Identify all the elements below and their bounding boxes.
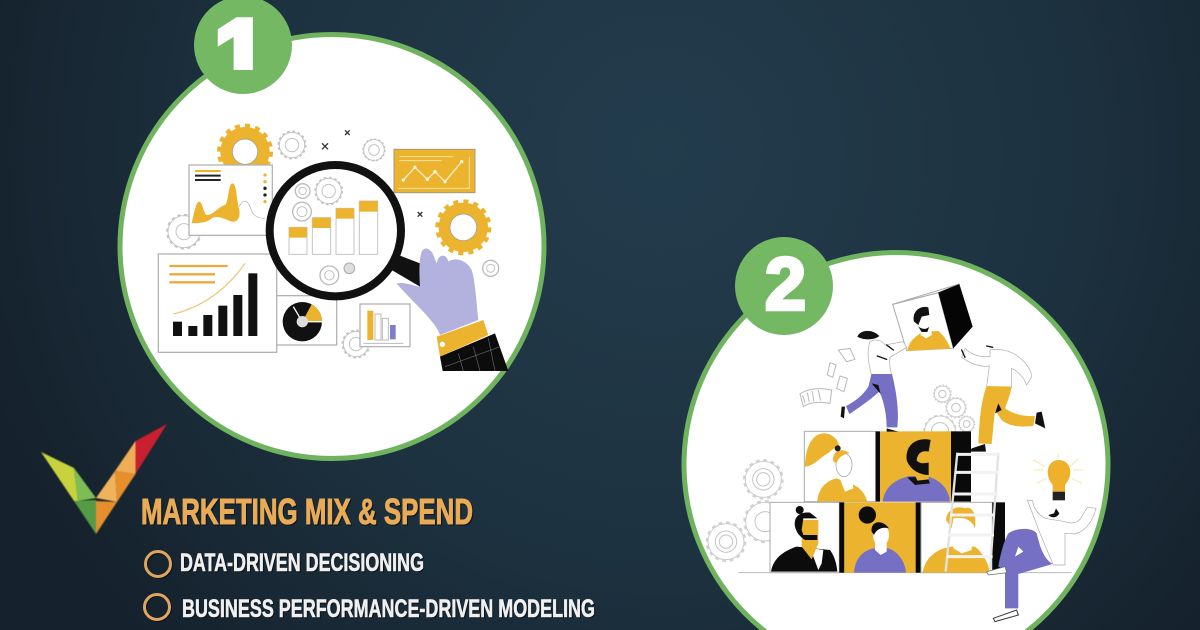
icon: magnifier handle [392, 255, 420, 287]
bullet ring 1 [146, 552, 170, 576]
illustration: team building blocks [707, 284, 1096, 622]
block: dark strip with ladder backing [951, 431, 971, 502]
icon: sleeve [440, 333, 508, 371]
icon: flying papers [800, 348, 855, 407]
icon: light bulb [1033, 453, 1083, 500]
floor line [738, 571, 1072, 574]
circle 2 ring [682, 250, 1111, 630]
chart: area panel [189, 165, 272, 235]
numeral 2: 2 [765, 242, 806, 326]
block: bearded man [880, 431, 951, 502]
block: strip [876, 431, 880, 502]
circle 2 disc [686, 255, 1106, 630]
panel: step 2 circle [682, 250, 1111, 630]
block: strip [916, 502, 921, 573]
block: strip [839, 502, 844, 573]
icon: outline gears [167, 132, 499, 357]
icon: magnifying glass [270, 165, 401, 296]
chart: donut panel [277, 296, 337, 345]
block: ponytail woman [804, 431, 876, 502]
logo: multicolour check mark [41, 424, 167, 534]
bullet ring 2 [144, 594, 170, 620]
figure: running woman [841, 331, 907, 432]
bullet text 1: DATA-DRIVEN DECISIONING [180, 549, 424, 577]
chart: growth bars panel [158, 254, 277, 352]
icon: outline gears [707, 386, 974, 560]
panel: step 1 circle [120, 34, 544, 458]
block: dark strip lower [992, 502, 1005, 573]
icon: gold gear top [219, 126, 271, 178]
figure: sitting man with idea [987, 500, 1096, 622]
block: woman with bun [844, 502, 916, 573]
numeral 1: 1 [214, 0, 268, 107]
icon: small crosses [322, 130, 422, 217]
bullet text 2: BUSINESS PERFORMANCE-DRIVEN MODELING [182, 595, 595, 623]
chart: small bars panel [360, 304, 410, 347]
icon: cube with man [893, 284, 973, 351]
icon: shirt cuff [437, 320, 488, 357]
badge: number 1 [194, 0, 292, 94]
heading and bullet list [141, 491, 595, 623]
badge disc 1 [194, 0, 292, 94]
figure: running man [962, 346, 1045, 452]
block: curly haired person [921, 502, 992, 573]
block: man with top-knot [770, 502, 839, 573]
icon: hand [397, 248, 478, 335]
illustration: data analysis [158, 126, 508, 371]
icon: ladder [946, 453, 998, 572]
heading: marketing mix and spend: MARKETING MIX & SPEND [141, 491, 473, 532]
badge: number 2 [735, 237, 833, 335]
icon: gold gear right [437, 201, 489, 253]
chart: gold line panel [394, 149, 475, 193]
badge disc 2 [735, 237, 833, 335]
circle 1 disc [120, 34, 544, 458]
